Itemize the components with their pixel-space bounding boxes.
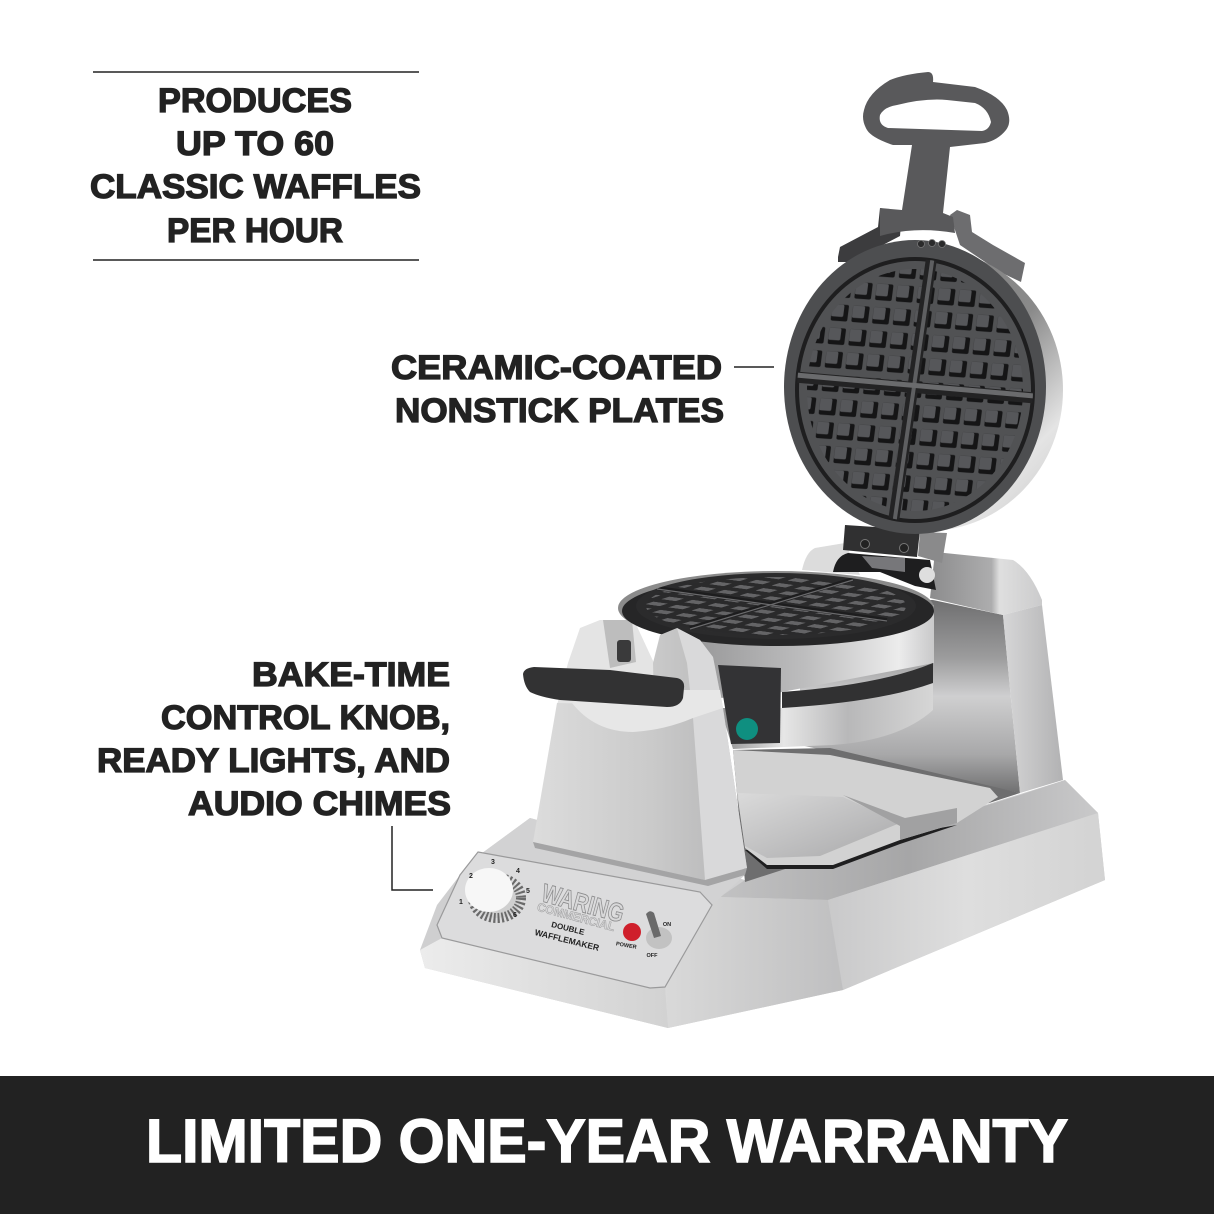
power light: [623, 923, 641, 941]
toggle switch: [646, 911, 672, 959]
knob scale: 2: [469, 873, 473, 880]
base front face: [665, 897, 843, 1028]
base right face: [828, 813, 1105, 990]
control box: [718, 665, 781, 744]
brand lettering: WARING: [539, 878, 627, 928]
power label: POWER: [615, 941, 637, 951]
floor behind tray: [733, 748, 1020, 882]
ready light: [736, 718, 758, 740]
drip tray: [733, 750, 998, 869]
left tower back: [557, 620, 654, 705]
toggle switch: ON: [663, 922, 671, 928]
screws: [918, 240, 946, 248]
waffle maker illustration: [420, 72, 1105, 1028]
brand lettering: WAFFLEMAKER: [534, 927, 600, 953]
base top surface: [720, 780, 1098, 900]
callout: bake-time control: READY LIGHTS, AND: [97, 742, 450, 780]
knob scale: 1: [459, 899, 463, 906]
callout: bake-time control: CONTROL KNOB,: [161, 699, 450, 737]
upper lid: [784, 240, 1063, 534]
callout: waffle output: PRODUCES: [158, 82, 352, 120]
brand lettering: [534, 878, 627, 953]
front handle: [523, 667, 684, 707]
callout: waffle output: CLASSIC WAFFLES: [90, 168, 421, 206]
footer band: [0, 1076, 1214, 1214]
callout: ceramic plates: NONSTICK PLATES: [395, 392, 724, 430]
callout: bake-time control: AUDIO CHIMES: [188, 785, 451, 823]
lid handle: [863, 72, 1009, 236]
callout: ceramic plates: CERAMIC-COATED: [391, 349, 722, 387]
knob scale: 4: [516, 868, 520, 875]
hinge: [833, 525, 947, 590]
base front lip: [420, 938, 668, 1028]
knob scale: 6: [513, 912, 517, 919]
brand lettering: COMMERCIAL: [536, 900, 616, 934]
right tower: [800, 543, 1063, 793]
brand lettering: DOUBLE: [550, 920, 586, 937]
hinge shoulders: [838, 208, 1025, 282]
upper waffle grid: [795, 255, 1035, 525]
control panel: [437, 852, 712, 988]
knob: [465, 868, 521, 918]
callout: waffle output: UP TO 60: [176, 125, 334, 163]
footer band: LIMITED ONE-YEAR WARRANTY: [146, 1107, 1068, 1175]
lower waffle grid: [646, 573, 906, 635]
base: [420, 780, 1105, 1028]
knob scale: 5: [526, 888, 530, 895]
toggle switch: OFF: [646, 953, 658, 959]
callout: waffle output: [90, 72, 421, 260]
lower plate body: [618, 571, 934, 749]
callout: bake-time control: BAKE-TIME: [252, 656, 450, 694]
left tower front: [533, 628, 747, 886]
knob scale: 3: [491, 859, 495, 866]
knob scale: [459, 859, 530, 919]
base shoulder: [470, 818, 745, 905]
callout: bake-time control: [97, 656, 451, 890]
callout: ceramic plates: [391, 349, 774, 430]
callout: waffle output: PER HOUR: [167, 212, 343, 250]
